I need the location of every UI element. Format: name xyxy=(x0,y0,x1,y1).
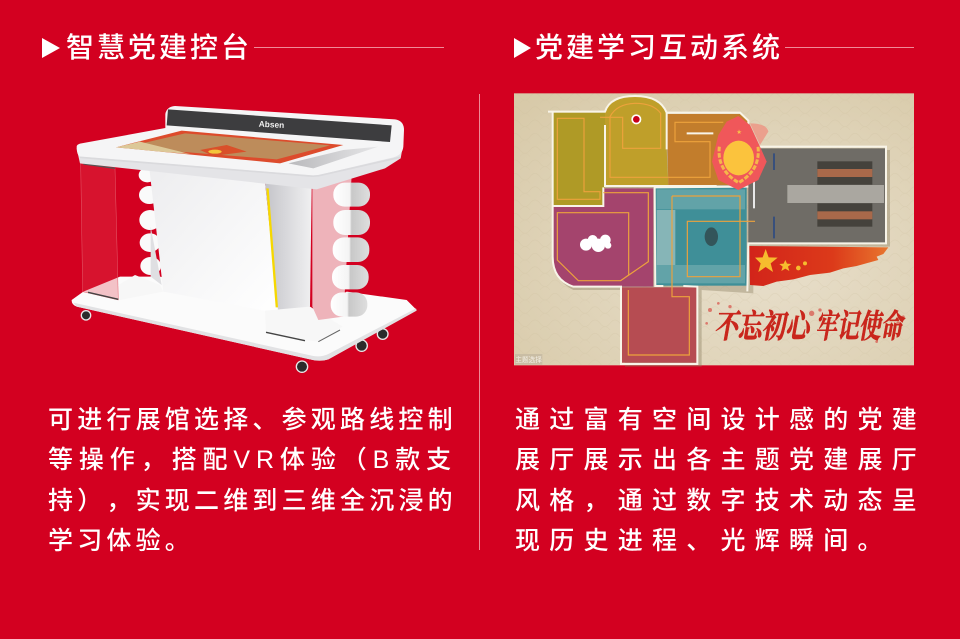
text block: left description xyxy=(48,406,457,555)
dark header strip xyxy=(167,109,392,142)
parchment background xyxy=(514,93,914,365)
teal room marker xyxy=(705,227,718,246)
base plate xyxy=(72,277,417,361)
teal tiled bands xyxy=(657,189,745,283)
rear glass foot xyxy=(118,275,163,300)
floor plan map xyxy=(514,93,914,367)
center divider xyxy=(479,94,480,550)
illustration: console desk xyxy=(72,106,417,373)
heading arrow: left xyxy=(42,38,60,58)
central white panel xyxy=(149,168,278,313)
yellow strip xyxy=(266,188,278,307)
text block: right description: 风格，通过数字技术动态呈 xyxy=(515,487,926,515)
right glass rack xyxy=(312,175,352,320)
wall shadow xyxy=(553,115,890,367)
slogan calligraphy xyxy=(705,302,907,346)
text block: right description: 展厅展示出各主题党建展厅 xyxy=(515,446,926,474)
room: magenta xyxy=(553,188,653,287)
side tray xyxy=(288,147,378,168)
theme button: 主题选择 xyxy=(515,355,542,364)
heading: 智慧党建控台: 智慧党建控台 xyxy=(66,32,252,63)
heading: 党建学习互动系统: 党建学习互动系统 xyxy=(535,32,783,63)
left transparent side panel xyxy=(81,163,118,300)
left speaker pods xyxy=(139,168,161,275)
theme button xyxy=(515,354,542,365)
text block: right description: 现历史进程、光辉瞬间。 xyxy=(515,527,892,555)
right support column xyxy=(265,182,312,315)
room: yellow left xyxy=(553,113,605,205)
room: yellow centre xyxy=(605,97,668,185)
route lines xyxy=(557,103,755,355)
party badge xyxy=(712,116,768,190)
right transparent panel xyxy=(265,307,343,342)
heading arrow: right xyxy=(514,38,531,58)
hall furniture xyxy=(754,153,884,238)
tabletop screen xyxy=(116,131,343,163)
dragon marker xyxy=(580,235,611,252)
text block: right description xyxy=(515,406,926,555)
room: red xyxy=(622,287,697,363)
text block: left description: 学习体验。 xyxy=(48,527,194,555)
text block: left description: 等操作，搭配VR体验（B款支 xyxy=(48,446,457,474)
red flag brush stroke xyxy=(749,246,888,286)
logo: Absen xyxy=(259,119,284,130)
heading rule: right xyxy=(785,47,914,48)
heading rule: left xyxy=(254,47,444,48)
room: grey hall xyxy=(748,148,885,243)
room: orange xyxy=(667,114,748,185)
casters xyxy=(81,311,388,372)
red map pin xyxy=(631,114,641,124)
right speaker pods xyxy=(331,183,370,317)
desk top xyxy=(77,106,404,189)
text block: left description: 可进行展馆选择、参观路线控制 xyxy=(48,406,457,434)
slogan calligraphy: 不忘初心 xyxy=(713,309,817,346)
walls xyxy=(548,96,886,364)
text block: right description: 通过富有空间设计感的党建 xyxy=(515,406,926,434)
text block: left description: 持），实现二维到三维全沉浸的 xyxy=(48,487,457,515)
room: teal xyxy=(655,187,747,286)
